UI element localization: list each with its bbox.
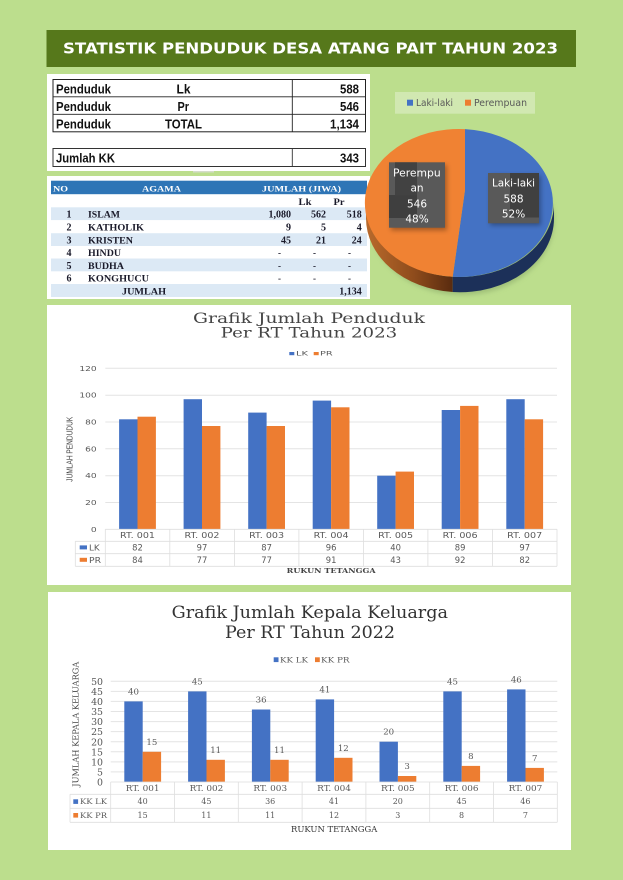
- chart title: [172, 603, 448, 642]
- panel: religion table: -: [313, 248, 316, 258]
- y axis labels: 15: [91, 747, 103, 758]
- chart title: Grafik Jumlah Kepala Keluarga: [172, 603, 448, 622]
- data table: 45: [201, 797, 211, 806]
- data table: RT. 003: [249, 531, 284, 540]
- bars: KK PR: [143, 752, 544, 782]
- y axis labels: 45: [91, 687, 103, 698]
- data labels: 12: [338, 744, 349, 754]
- y axis labels: 30: [91, 717, 103, 728]
- data table: RT. 003: [253, 784, 287, 793]
- panel: religion table: JUMLAH (JIWA): [262, 184, 341, 194]
- chart title: Per RT Tahun 2022: [225, 623, 395, 642]
- data table: RT. 007: [507, 531, 542, 540]
- data label: Laki-laki: Laki-laki: [492, 178, 535, 190]
- title banner: STATISTIK PENDUDUK DESA ATANG PAIT TAHUN 2023: [63, 40, 558, 58]
- y axis labels: [79, 365, 97, 534]
- data labels: 40: [128, 687, 139, 697]
- panel: religion table: -: [278, 261, 281, 271]
- pie legend: Laki-laki: [416, 98, 453, 109]
- bars: PR: [138, 406, 543, 529]
- panel: religion table: Lk: [298, 197, 312, 207]
- data labels: 15: [146, 738, 157, 748]
- panel: chart jumlah kepala keluarga per RT: [48, 592, 571, 850]
- panel: religion table: HINDU: [88, 248, 122, 258]
- data table: 89: [455, 542, 465, 552]
- data label: Perempuan: 48%: [405, 214, 429, 226]
- data table: 36: [265, 797, 275, 806]
- y axis labels: 40: [91, 697, 103, 708]
- panel: religion table: 9: [286, 223, 291, 234]
- pie chart: gender share: [365, 129, 554, 295]
- panel: religion table: 3: [66, 236, 72, 246]
- data labels: 11: [274, 746, 285, 756]
- panel: population summary table: Jumlah KK: [56, 151, 116, 166]
- y axis title: JUMLAH KEPALA KELUARGA: [72, 661, 82, 788]
- panel: religion table: JUMLAH: [122, 286, 166, 296]
- panel: religion table: KRISTEN: [88, 236, 134, 246]
- pie legend: [395, 92, 535, 114]
- panel: religion table: NO: [53, 184, 68, 194]
- panel: religion table: ISLAM: [88, 210, 121, 220]
- panel: religion table: 1: [66, 210, 72, 221]
- chart title: Per RT Tahun 2023: [221, 325, 397, 341]
- panel: religion table: -: [313, 261, 316, 271]
- panel: religion table: 2: [66, 223, 72, 234]
- panel: population summary table: Lk: [176, 81, 191, 96]
- data table: RT. 006: [445, 784, 478, 793]
- data label: Perempuan: 546: [407, 198, 427, 210]
- data table: RT. 005: [381, 784, 415, 793]
- data table: RT. 002: [190, 784, 223, 793]
- panel: religion table: 4: [66, 248, 72, 259]
- y axis labels: [91, 677, 103, 789]
- chart title: [193, 311, 426, 341]
- data table: KK LK: [80, 797, 107, 806]
- data table: 77: [261, 555, 272, 565]
- data table: RT. 004: [317, 784, 351, 793]
- bars: KK LK: [124, 689, 526, 782]
- y axis title: JUMLAH PENDUDUK: [64, 416, 74, 482]
- y axis labels: 35: [91, 707, 103, 718]
- data table: 40: [390, 542, 401, 552]
- chart legend: KK LK: [280, 655, 308, 664]
- data table: RT. 002: [184, 531, 220, 540]
- panel: religion table: AGAMA: [142, 184, 182, 194]
- panel: religion table: -: [348, 274, 351, 284]
- chart legend: [289, 352, 333, 358]
- y axis labels: 60: [85, 445, 97, 453]
- data table: 46: [520, 797, 530, 806]
- panel: population summary table: [47, 74, 370, 171]
- panel: population summary table: 546: [340, 99, 359, 114]
- data labels: 8: [468, 752, 474, 762]
- y axis labels: 0: [91, 526, 97, 534]
- x axis title: RUKUN TETANGGA: [291, 825, 378, 834]
- y axis labels: 5: [97, 768, 103, 778]
- panel: religion table: 24: [352, 236, 362, 246]
- title banner: [46, 30, 576, 67]
- data labels: 36: [256, 696, 267, 706]
- chart legend: LK: [296, 352, 308, 358]
- data table: [75, 529, 557, 566]
- data label: Laki-laki: 52%: [502, 209, 525, 221]
- bars: LK: [119, 399, 525, 529]
- panel: religion table: 1,080: [268, 210, 291, 221]
- data table: 97: [519, 542, 530, 552]
- panel: religion table: 4: [357, 223, 362, 234]
- data table: KK PR: [80, 811, 107, 820]
- data labels: 45: [447, 677, 458, 687]
- panel: chart jumlah penduduk per RT: [47, 305, 571, 585]
- data label: Perempuan: [389, 162, 447, 230]
- panel: religion table: 5: [66, 261, 72, 272]
- data label: Laki-laki: [488, 173, 541, 226]
- y axis labels: 120: [79, 365, 97, 373]
- data labels: 11: [210, 746, 221, 756]
- data table: 77: [197, 555, 207, 565]
- panel: religion table: BUDHA: [88, 261, 125, 271]
- panel: religion table: KONGHUCU: [88, 274, 150, 284]
- chart legend: KK PR: [321, 655, 350, 664]
- data table: RT. 006: [443, 531, 478, 540]
- y axis labels: 10: [91, 758, 103, 768]
- data table: PR: [89, 556, 102, 565]
- data table: 87: [261, 542, 272, 552]
- data table: 15: [138, 811, 148, 820]
- panel: religion table: 562: [311, 210, 326, 221]
- data table: 84: [132, 555, 143, 565]
- panel: religion table: 1,134: [339, 286, 362, 298]
- panel: religion table: [47, 176, 370, 299]
- pie legend: Perempuan: [474, 98, 527, 109]
- data table: RT. 005: [378, 531, 413, 540]
- data table: RT. 004: [314, 531, 349, 540]
- data table: 92: [455, 555, 465, 565]
- y axis labels: 20: [85, 499, 97, 507]
- data table: 82: [519, 555, 530, 565]
- panel: religion table: 45: [281, 236, 291, 246]
- data labels: 41: [319, 685, 330, 695]
- data table: 82: [132, 542, 143, 552]
- data labels: 46: [511, 675, 522, 685]
- data table: 11: [265, 811, 275, 820]
- y axis labels: 20: [91, 737, 103, 748]
- data labels: 20: [383, 728, 394, 738]
- panel: population summary table: Pr: [178, 99, 189, 114]
- y axis labels: 0: [97, 778, 103, 789]
- data labels: 3: [404, 762, 410, 772]
- panel: population summary table: 1,134: [330, 116, 360, 132]
- panel: religion table: -: [348, 248, 351, 258]
- panel: population summary table: 343: [340, 151, 359, 166]
- data table: 91: [326, 555, 336, 565]
- data table: 40: [138, 797, 148, 806]
- data label: Perempuan: Perempu: [393, 168, 441, 180]
- data labels: [128, 675, 537, 772]
- data table: 8: [459, 811, 464, 820]
- data table: 7: [523, 811, 528, 820]
- chart legend: [274, 655, 350, 664]
- data label: Laki-laki: 588: [503, 193, 524, 205]
- data label: Perempuan: an: [410, 183, 424, 195]
- data table: LK: [89, 543, 101, 552]
- data labels: 45: [192, 677, 203, 687]
- data table: RT. 001: [126, 784, 160, 793]
- data table: 12: [329, 811, 339, 820]
- chart title: Grafik Jumlah Penduduk: [193, 311, 426, 327]
- data table: 45: [457, 797, 467, 806]
- data table: 20: [393, 797, 403, 806]
- y axis labels: 80: [85, 418, 97, 426]
- panel: religion table: 6: [66, 274, 72, 285]
- panel: religion table: 21: [316, 236, 326, 246]
- panel: religion table: Pr: [334, 197, 344, 207]
- data table: 43: [390, 555, 401, 565]
- x axis title: RUKUN TETANGGA: [287, 567, 377, 575]
- panel: religion table: -: [348, 261, 351, 271]
- panel: religion table: -: [278, 274, 281, 284]
- data table: 41: [329, 797, 339, 806]
- panel: population summary table: TOTAL: [165, 116, 202, 132]
- data table: RT. 007: [509, 784, 542, 793]
- data table: [70, 782, 557, 822]
- panel: population summary table: Penduduk: [56, 81, 112, 96]
- panel: religion table: -: [313, 274, 316, 284]
- chart legend: PR: [320, 352, 333, 358]
- panel: population summary table: 588: [340, 81, 359, 96]
- panel: religion table: 518: [347, 210, 362, 221]
- y axis labels: 50: [91, 677, 103, 688]
- panel: religion table: KATHOLIK: [88, 223, 144, 233]
- panel: religion table: -: [278, 248, 281, 258]
- y axis labels: 100: [79, 392, 97, 400]
- panel: religion table: 5: [321, 223, 326, 234]
- data table: 11: [201, 811, 211, 820]
- data labels: 7: [532, 754, 537, 764]
- data table: RT. 001: [120, 531, 155, 540]
- panel: population summary table: Penduduk: [56, 116, 112, 132]
- data table: 97: [197, 542, 207, 552]
- y axis labels: 40: [85, 472, 97, 480]
- y axis labels: 25: [91, 727, 103, 738]
- data table: 3: [395, 811, 400, 820]
- data table: 96: [326, 542, 336, 552]
- panel: population summary table: Penduduk: [56, 99, 112, 114]
